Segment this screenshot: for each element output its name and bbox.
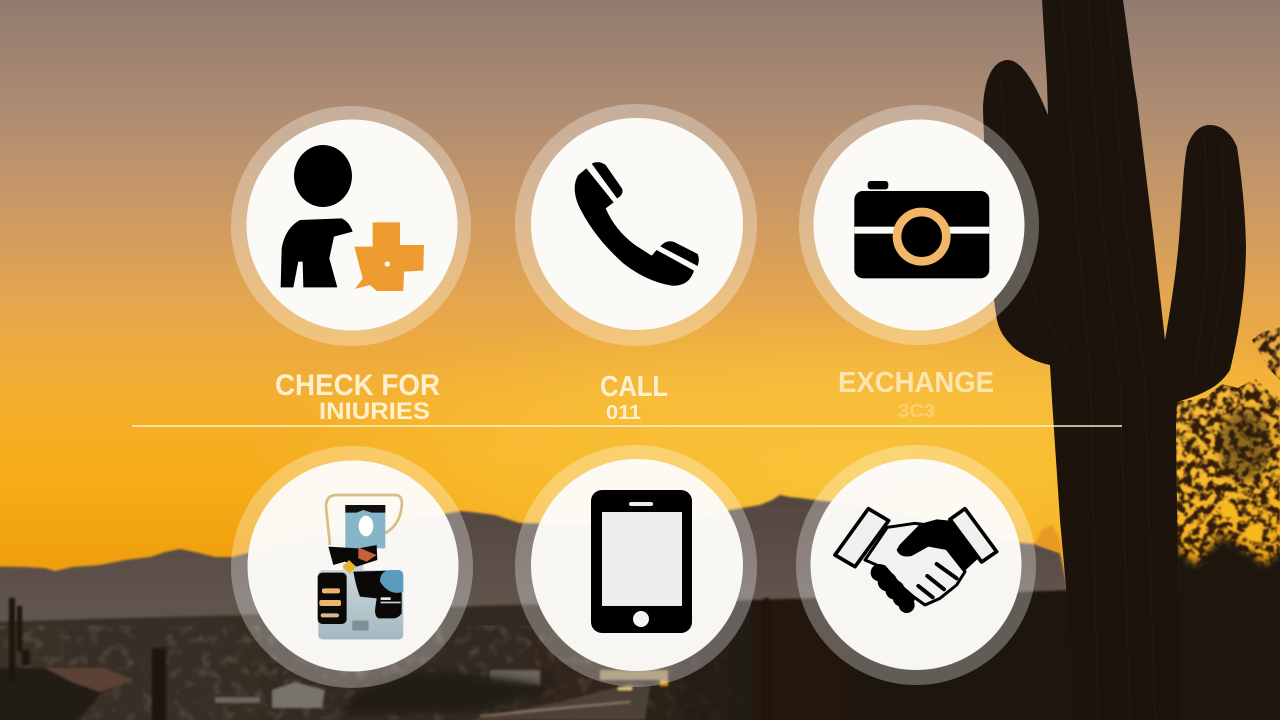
circle badge 6 [796, 445, 1036, 685]
label: exchange: 3C3 [898, 401, 935, 421]
circle badge 5 [515, 445, 757, 687]
icon: person with orange medical cross [281, 145, 424, 291]
icon: handshake [835, 509, 997, 613]
labels row [275, 367, 994, 425]
circle badge 4 [231, 446, 473, 688]
desert tree foliage at right [1172, 326, 1280, 720]
label: call 011 [600, 371, 668, 424]
dark shrubs [345, 671, 560, 716]
step 2: call 911 [515, 104, 757, 346]
town and valley floor [0, 590, 1280, 720]
icon: telephone handset [575, 162, 699, 286]
label: check for injuries [275, 369, 440, 425]
town mottling [0, 625, 683, 720]
orange ridge glimpse [1035, 525, 1062, 553]
road [470, 670, 668, 720]
label: call 011: CALL [600, 371, 668, 403]
step 1: check for injuries [231, 106, 471, 346]
circle badge 3 [799, 105, 1039, 345]
circle badge 2 [515, 104, 757, 346]
label: check for injuries: CHECK FOR [275, 369, 440, 402]
houses and trees at lower left [0, 598, 769, 720]
circle badge 1 [231, 106, 471, 346]
distant mountains [0, 495, 1070, 625]
step 3: exchange information [799, 105, 1039, 345]
label: call 011: 011 [606, 402, 641, 424]
label: check for injuries: INIURIES [319, 398, 430, 425]
step 6: handshake [796, 445, 1036, 685]
label: exchange [838, 367, 994, 421]
saguaro cactus silhouette [983, 0, 1246, 720]
icon: stacked documents and cards [318, 495, 403, 639]
step 4: documents / insurance [231, 446, 473, 688]
icon: smartphone [591, 490, 692, 633]
step 5: smartphone [515, 445, 757, 687]
divider line [132, 425, 1122, 427]
icon: camera [854, 181, 989, 278]
label: exchange: EXCHANGE [838, 367, 994, 399]
